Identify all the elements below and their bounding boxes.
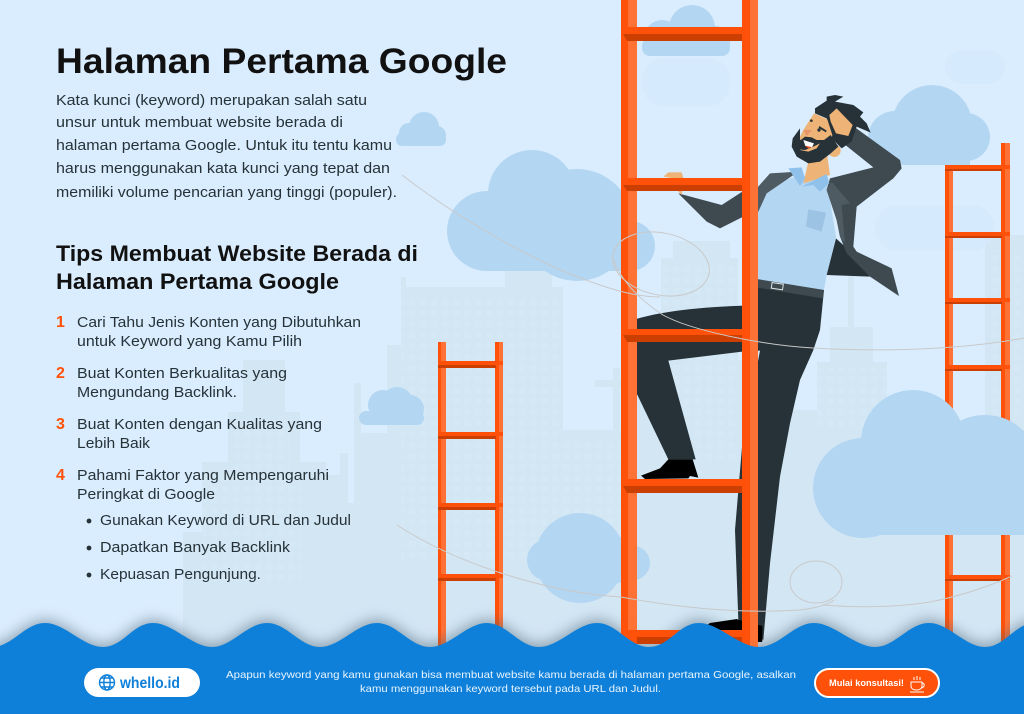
- man: hand on head: [829, 108, 853, 136]
- main orange ladder: [621, 0, 758, 650]
- tip 4: [56, 467, 329, 503]
- tip 2: [56, 365, 287, 401]
- tip 4: Pahami Faktor yang Mempengaruhi: [77, 468, 329, 484]
- pale distant clouds: [642, 50, 1005, 251]
- man: jacket left lapel: [757, 172, 798, 213]
- tip 4: Peringkat di Google: [77, 487, 215, 503]
- cloud: large lower right: [813, 390, 1024, 538]
- brand pill: [84, 668, 200, 697]
- man: neck: [803, 156, 830, 183]
- city skyline background: [183, 235, 1024, 648]
- tip 3: [56, 416, 322, 452]
- man climbing the ladder: [635, 95, 902, 642]
- cloud: large centre: [447, 150, 655, 281]
- man: eyes and brow: [810, 119, 827, 132]
- icon: coffee cup: [910, 676, 924, 692]
- man: belt: [757, 279, 824, 298]
- tip 1: Cari Tahu Jenis Konten yang Dibutuhkan: [77, 315, 361, 331]
- icon: globe: [100, 675, 114, 690]
- tips heading: Halaman Pertama Google: [56, 269, 339, 294]
- man: jacket right arm and flap: [827, 125, 902, 296]
- sub-bullets: Gunakan Keyword di URL dan Judul: [100, 513, 351, 529]
- cloud: top right: [868, 85, 990, 165]
- intro paragraph: harus menggunakan kata kunci yang tepat dan: [56, 161, 390, 177]
- sub-bullets: [87, 513, 351, 583]
- tip 2: Mengundang Backlink.: [77, 385, 237, 401]
- man: collar: [788, 167, 829, 192]
- man: standing shoe: [710, 619, 762, 642]
- man: left arm: [678, 191, 743, 228]
- cloud: small near paragraph: [396, 112, 446, 146]
- left small ladder: [438, 342, 503, 648]
- man: hand on rung: [663, 172, 684, 195]
- right ladder: [945, 143, 1010, 648]
- man: standing leg: [735, 280, 824, 640]
- man: jacket interior: [827, 238, 870, 277]
- cloud: top by ladder: [642, 5, 730, 56]
- consultation button: [815, 669, 939, 697]
- intro paragraph: halaman pertama Google. Untuk itu tentu kamu: [56, 138, 392, 154]
- intro paragraph: [56, 93, 397, 201]
- intro paragraph: memiliki volume pencarian yang tinggi (populer).: [56, 185, 397, 201]
- sub-bullets: Kepuasan Pengunjung.: [100, 567, 261, 583]
- ladder feet over shadow: [621, 619, 762, 648]
- man: hair: [815, 95, 871, 148]
- man: nose: [803, 130, 812, 136]
- consultation button: Mulai konsultasi!: [829, 678, 904, 689]
- tip 4: 4: [56, 467, 65, 484]
- tip 2: 2: [56, 365, 65, 382]
- man: shirt pocket: [806, 209, 826, 232]
- man: face: [797, 113, 832, 155]
- tip 2: Buat Konten Berkualitas yang: [77, 366, 287, 382]
- tip 3: Buat Konten dengan Kualitas yang: [77, 417, 322, 433]
- clouds: [359, 5, 1024, 603]
- sub-bullets: Dapatkan Banyak Backlink: [100, 540, 291, 556]
- tip 1: untuk Keyword yang Kamu Pilih: [77, 334, 302, 350]
- man: lower body: [635, 280, 824, 642]
- man: ear: [828, 144, 841, 157]
- footer message: [226, 669, 796, 695]
- tip 1: 1: [56, 314, 65, 331]
- footer message: kamu menggunakan keyword tersebut pada URL dan Judul.: [360, 683, 661, 695]
- intro paragraph: unsur untuk membuat website berada di: [56, 115, 343, 131]
- man: shirt: [757, 175, 836, 290]
- intro paragraph: Kata kunci (keyword) merupakan salah satu: [56, 93, 367, 109]
- man: beard: [792, 128, 838, 163]
- cloud: lower centre: [527, 513, 650, 603]
- tips list: [56, 314, 361, 583]
- man: raised leg: [635, 305, 760, 459]
- man: mouth: [803, 140, 814, 147]
- tips heading: [56, 241, 418, 294]
- tip 3: 3: [56, 416, 65, 433]
- brand pill: whello.id: [119, 675, 180, 692]
- tips heading: Tips Membuat Website Berada di: [56, 241, 418, 266]
- man: raised shoe: [641, 459, 698, 479]
- man: upper body: [663, 95, 902, 298]
- wave shadow: [0, 620, 1024, 711]
- tip 3: Lebih Baik: [77, 436, 151, 452]
- footer message: Apapun keyword yang kamu gunakan bisa membuat website kamu berada di halaman pertama Google, asalkan: [226, 669, 796, 681]
- footer wave band: [0, 623, 1024, 714]
- tip 1: [56, 314, 361, 350]
- decorative curved lines: [397, 175, 1024, 611]
- title: Halaman Pertama Google: [56, 42, 507, 81]
- cloud: small near list: [359, 387, 424, 425]
